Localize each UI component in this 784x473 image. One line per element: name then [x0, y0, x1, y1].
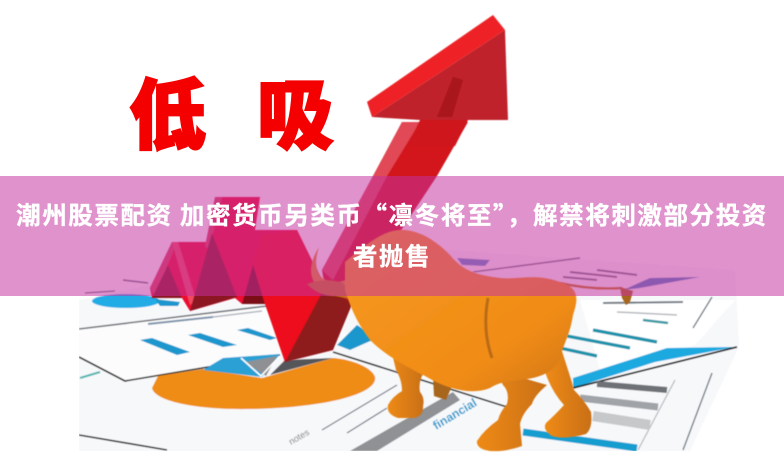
- title: 低吸: 吸: [257, 55, 334, 166]
- red arrow: [150, 15, 508, 362]
- arrow shaft: [322, 122, 468, 303]
- arrow head: [372, 30, 508, 120]
- bull: [307, 230, 633, 451]
- title: 低吸: [129, 55, 334, 166]
- front leg: [388, 345, 424, 418]
- rear leg far: [545, 345, 591, 438]
- body crease: [486, 298, 492, 358]
- illustration: bull and rising arrow on financial papers: [79, 14, 738, 452]
- paper label: notes: notes: [287, 427, 311, 447]
- far leg: [433, 377, 452, 400]
- headline: 潮州股票配资 加密货币另类币“凛冬将至”，解禁将刺激部分投资: [16, 197, 768, 232]
- paper label: financial: financial: [430, 395, 479, 433]
- blue bar charts: [92, 294, 377, 355]
- rear leg near: [477, 370, 547, 451]
- body: [345, 230, 576, 391]
- horn: [311, 247, 345, 289]
- gray text lines: [85, 258, 712, 450]
- tail: [560, 283, 622, 288]
- pie chart: orange segment: [152, 358, 375, 409]
- title: 低吸: 低: [129, 55, 206, 166]
- head: [307, 280, 355, 300]
- blue wedge and black line: [573, 347, 735, 388]
- financial papers: [79, 250, 739, 451]
- ribbon bright downward face: [253, 230, 325, 362]
- teal bars: [560, 330, 657, 356]
- headline band: [0, 176, 784, 296]
- zig-zag ribbon: [150, 197, 333, 362]
- gray and blue stacked bars: [597, 384, 667, 390]
- headline: [16, 197, 768, 273]
- headline: 者抛售: [353, 238, 431, 273]
